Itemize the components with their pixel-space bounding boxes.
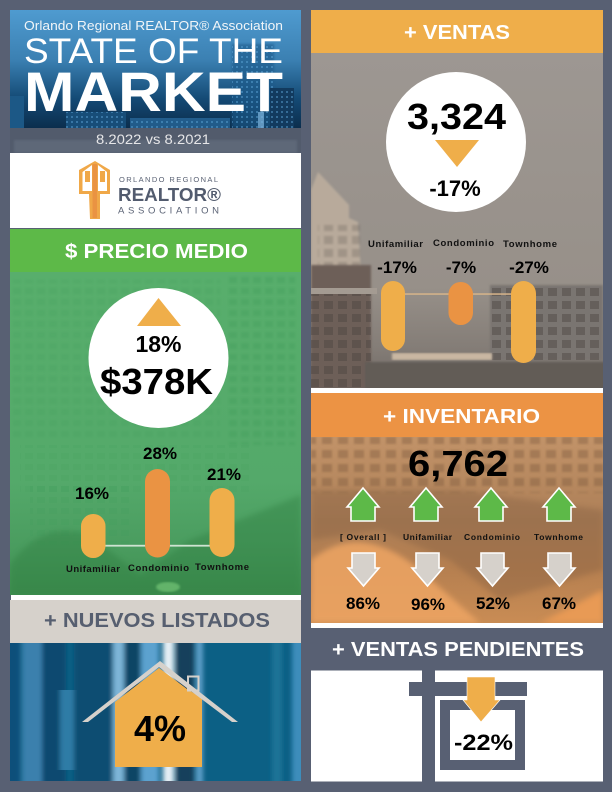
date band: 8.2022 vs 8.2021 bbox=[96, 132, 210, 147]
icon: house key bbox=[79, 161, 110, 219]
panel: ventas pendientes bbox=[311, 639, 603, 782]
heading bbox=[311, 393, 603, 437]
icon: house: 4% bbox=[134, 708, 186, 749]
percentages: 86% bbox=[346, 594, 380, 613]
percentages: 52% bbox=[476, 594, 510, 613]
bar chart: 16% bbox=[75, 484, 109, 503]
circle callout: 18% bbox=[135, 331, 182, 357]
bar chart: Unifamiliar bbox=[66, 564, 120, 575]
bar chart: 21% bbox=[207, 465, 241, 484]
icons: green up arrows bbox=[347, 488, 575, 521]
skyline illustration bbox=[10, 44, 294, 128]
heading: + NUEVOS LISTADOS bbox=[44, 610, 270, 632]
percentage: -22% bbox=[454, 730, 513, 755]
bar chart: -27% bbox=[509, 258, 549, 277]
circle callout bbox=[386, 72, 526, 212]
bar chart bbox=[368, 238, 557, 363]
bar chart: Unifamiliar bbox=[368, 239, 423, 250]
panel: inventario bbox=[311, 393, 603, 628]
icons: grey down arrows bbox=[348, 553, 575, 586]
bar chart: -17% bbox=[377, 258, 417, 277]
panel: logo: ASSOCIATION bbox=[118, 206, 219, 216]
panel: precio medio bbox=[10, 229, 301, 600]
title line 2: MARKET bbox=[24, 60, 283, 123]
percentages: 67% bbox=[542, 594, 576, 613]
percentages bbox=[346, 594, 576, 614]
category labels: Condominio bbox=[464, 532, 520, 542]
white panels bbox=[311, 670, 603, 782]
photo background bbox=[311, 437, 603, 623]
category labels: Townhome bbox=[534, 532, 583, 542]
category labels: [ Overall ] bbox=[340, 532, 386, 542]
bar chart: Townhome bbox=[503, 239, 557, 250]
bar chart: Townhome bbox=[195, 562, 249, 573]
date band bbox=[10, 128, 301, 153]
photo background bbox=[10, 272, 301, 595]
circle callout: 3,324 bbox=[407, 96, 506, 137]
heading bbox=[311, 10, 603, 53]
heading: + VENTAS PENDIENTES bbox=[332, 639, 584, 661]
logo text: ORLANDO REGIONAL bbox=[119, 175, 218, 184]
title line 1: STATE OF THE bbox=[24, 32, 283, 71]
panel: header banner bbox=[10, 10, 301, 153]
photo background bbox=[5, 640, 306, 785]
panel: ventas bbox=[311, 10, 605, 393]
circle callout: $378K bbox=[100, 361, 213, 402]
heading: + VENTAS bbox=[404, 22, 510, 44]
bar chart: 28% bbox=[143, 444, 177, 463]
bar chart bbox=[66, 444, 249, 575]
panel: nuevos listados bbox=[5, 600, 306, 785]
bar chart: Condominio bbox=[433, 238, 494, 249]
icon: for-sale signpost bbox=[409, 682, 527, 770]
photo background bbox=[311, 53, 605, 390]
panel: logo: REALTOR® bbox=[118, 185, 221, 205]
percentages: 96% bbox=[411, 595, 445, 614]
total figure: 6,762 bbox=[408, 443, 508, 484]
panel: logo bbox=[10, 153, 301, 228]
heading: + INVENTARIO bbox=[383, 406, 540, 428]
bar chart: -7% bbox=[446, 258, 476, 277]
heading: $ PRECIO MEDIO bbox=[65, 241, 248, 263]
circle callout bbox=[88, 288, 228, 428]
association name: Orlando Regional REALTOR® Association bbox=[24, 18, 283, 33]
icon: down arrow bbox=[463, 677, 500, 722]
circle callout: -17% bbox=[429, 176, 481, 201]
heading bbox=[10, 229, 301, 273]
bar chart: Condominio bbox=[128, 563, 189, 574]
category labels: Unifamiliar bbox=[403, 532, 453, 542]
icon: house bbox=[82, 661, 238, 767]
category labels bbox=[340, 532, 583, 542]
heading bbox=[10, 600, 301, 643]
